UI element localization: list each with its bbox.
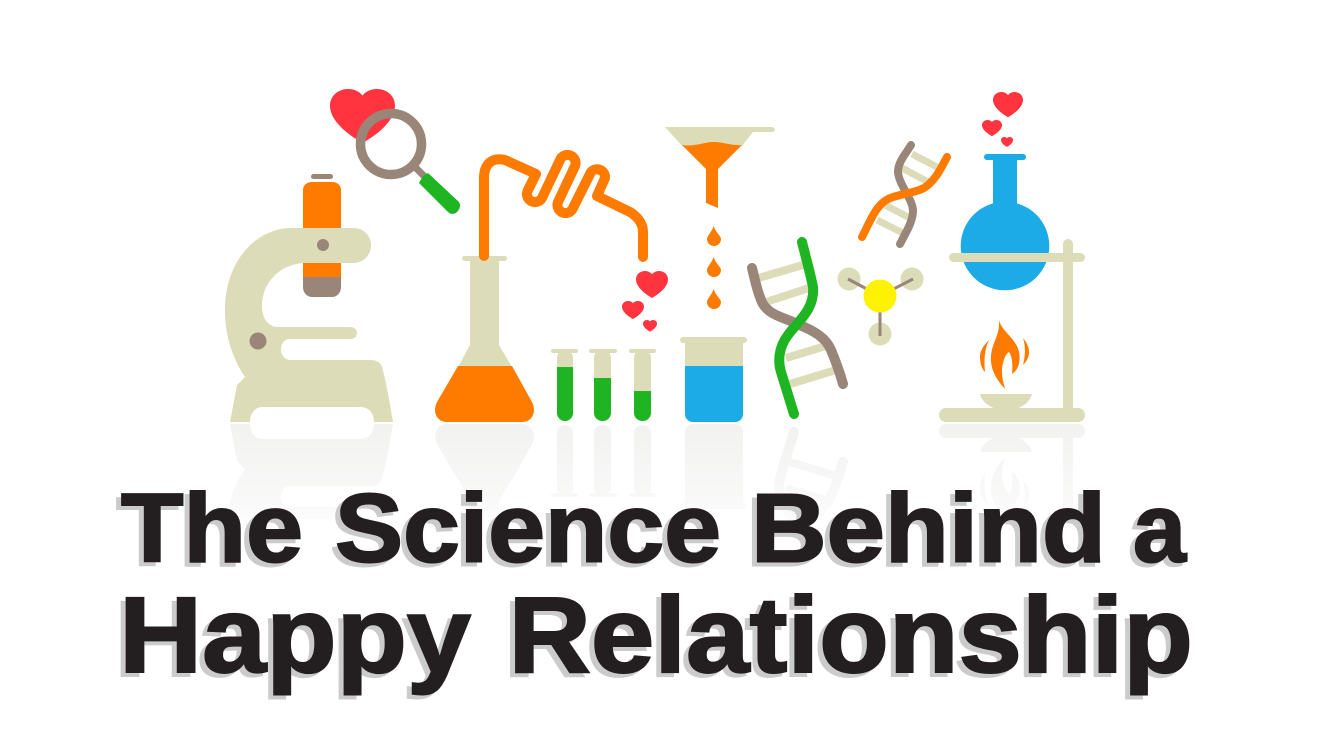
icon: small DNA helix — [862, 145, 947, 244]
title: The — [121, 473, 303, 582]
icon: beaker with blue liquid — [680, 337, 747, 422]
title: Relationship — [508, 575, 1193, 695]
icon: heart under magnifying glass — [330, 89, 395, 143]
icon: flame — [980, 320, 1029, 389]
icon: microscope — [225, 174, 393, 422]
icon: stand and burner dish — [939, 239, 1085, 422]
icon: conical flask with orange liquid — [435, 256, 534, 422]
icon: hearts above test tubes — [622, 271, 668, 332]
title: Science — [335, 473, 721, 582]
icon: three test tubes with green liquid — [551, 349, 656, 421]
icon: round-bottom flask with blue liquid — [961, 154, 1049, 290]
icon: large DNA helix — [752, 242, 843, 414]
icon: hearts above round flask — [982, 92, 1023, 147]
title: Behind — [751, 473, 1106, 582]
icon: molecule — [838, 268, 924, 346]
floor reflection of the lab equipment — [230, 424, 1085, 488]
icon: magnifying glass — [360, 114, 460, 214]
title: a — [1133, 473, 1187, 582]
title — [119, 473, 1193, 695]
arrow: coiled orange tube — [484, 155, 643, 257]
infographic canvas — [116, 89, 1190, 700]
icon: orange drops — [707, 226, 721, 309]
icon: funnel with orange liquid — [665, 127, 775, 208]
title: Happy — [119, 575, 471, 695]
